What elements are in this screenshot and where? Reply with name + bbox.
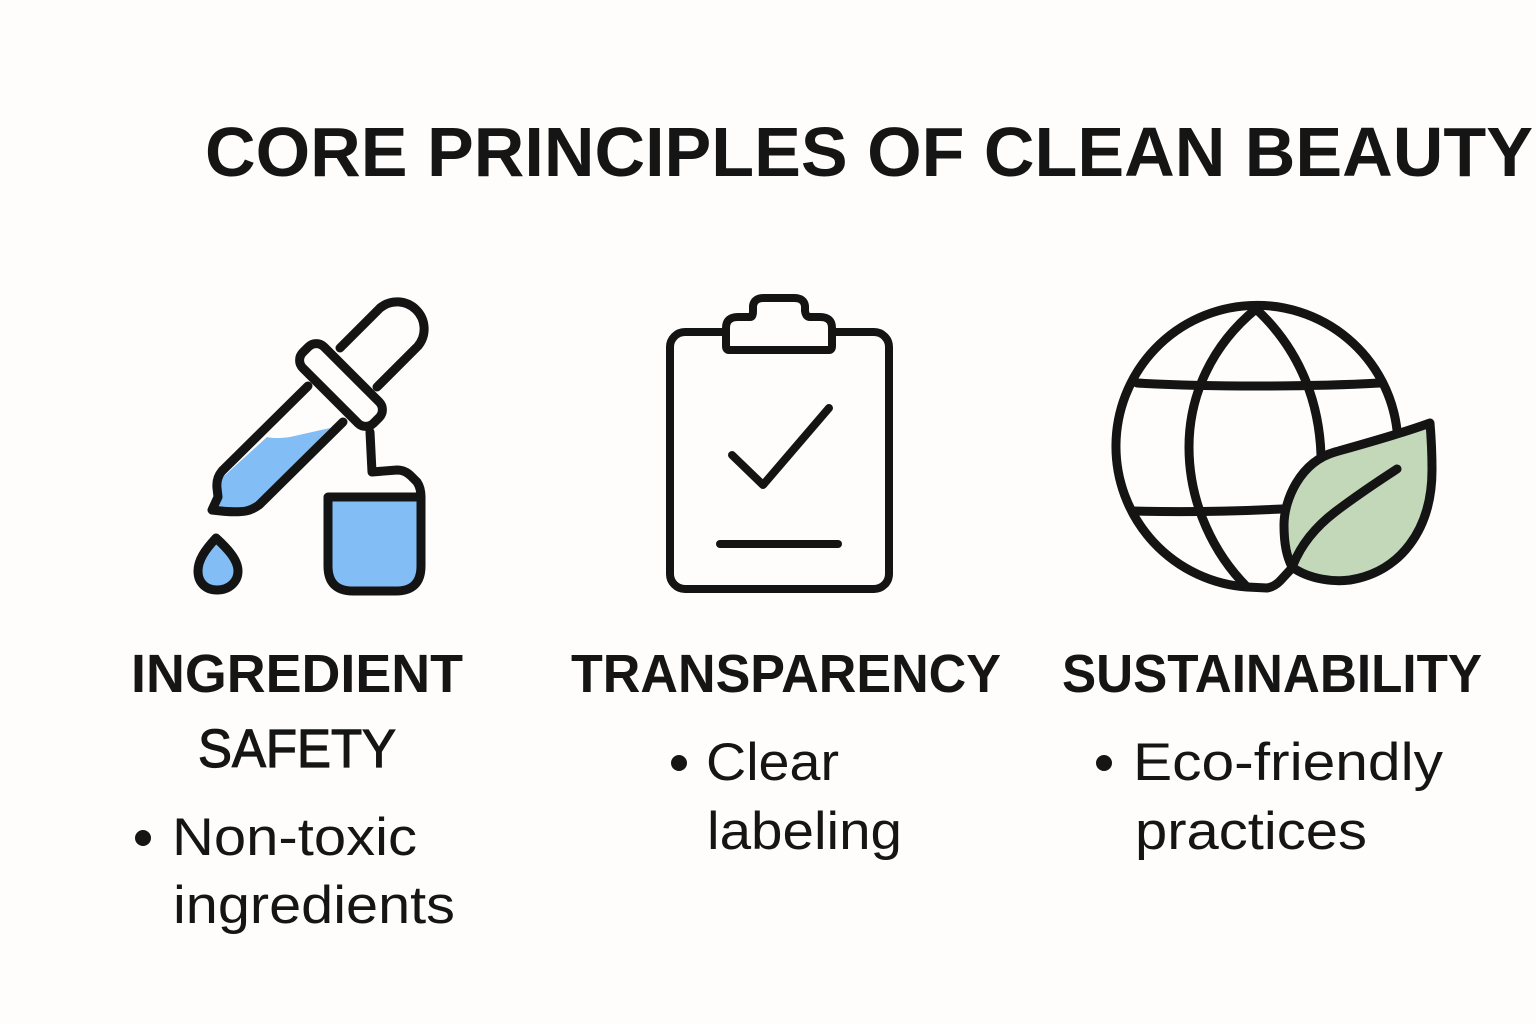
beaker neck bbox=[370, 432, 421, 497]
dropper liquid bbox=[216, 428, 330, 509]
panel: ingredient safety bbox=[131, 644, 463, 935]
bullet: eco-friendly practices: Eco-friendly bbox=[1133, 733, 1444, 792]
dropper bulb bbox=[340, 302, 424, 387]
bullet: non-toxic ingredients bbox=[135, 808, 455, 935]
clipboard clip bbox=[726, 298, 832, 350]
panel: transparency bbox=[571, 644, 1001, 861]
heading line: safety: SAFETY bbox=[198, 719, 396, 779]
underline bbox=[720, 540, 838, 548]
bullet: clear labeling: Clear bbox=[706, 733, 839, 792]
bullet: non-toxic ingredients: Non-toxic bbox=[172, 808, 417, 867]
leaf bbox=[1284, 423, 1432, 581]
dropper collar bbox=[295, 339, 387, 431]
icon: dropper and beaker bbox=[198, 302, 424, 591]
panel: sustainability bbox=[1062, 644, 1482, 861]
bullet: non-toxic ingredients: ingredients bbox=[173, 876, 455, 935]
globe meridians bbox=[1189, 309, 1321, 587]
check mark bbox=[732, 408, 829, 485]
bullet: clear labeling: labeling bbox=[707, 802, 902, 861]
bullet: clear labeling bbox=[671, 733, 902, 861]
heading: sustainability: SUSTAINABILITY bbox=[1062, 644, 1482, 704]
globe outline bbox=[1116, 305, 1397, 588]
dropper tube bbox=[212, 386, 343, 512]
clipboard board bbox=[670, 332, 889, 589]
beaker bbox=[328, 497, 421, 591]
bullet: eco-friendly practices: practices bbox=[1135, 802, 1367, 861]
heading: transparency: TRANSPARENCY bbox=[571, 644, 1001, 704]
leaf vein bbox=[1293, 469, 1397, 565]
icon: globe with leaf bbox=[1116, 305, 1432, 588]
globe latitudes bbox=[1133, 383, 1380, 512]
droplet bbox=[198, 538, 238, 590]
heading: ingredient: INGREDIENT bbox=[131, 644, 463, 704]
bullet: eco-friendly practices bbox=[1096, 733, 1444, 861]
title: CORE PRINCIPLES OF CLEAN BEAUTY bbox=[205, 113, 1533, 191]
icon: clipboard with check bbox=[670, 298, 889, 589]
